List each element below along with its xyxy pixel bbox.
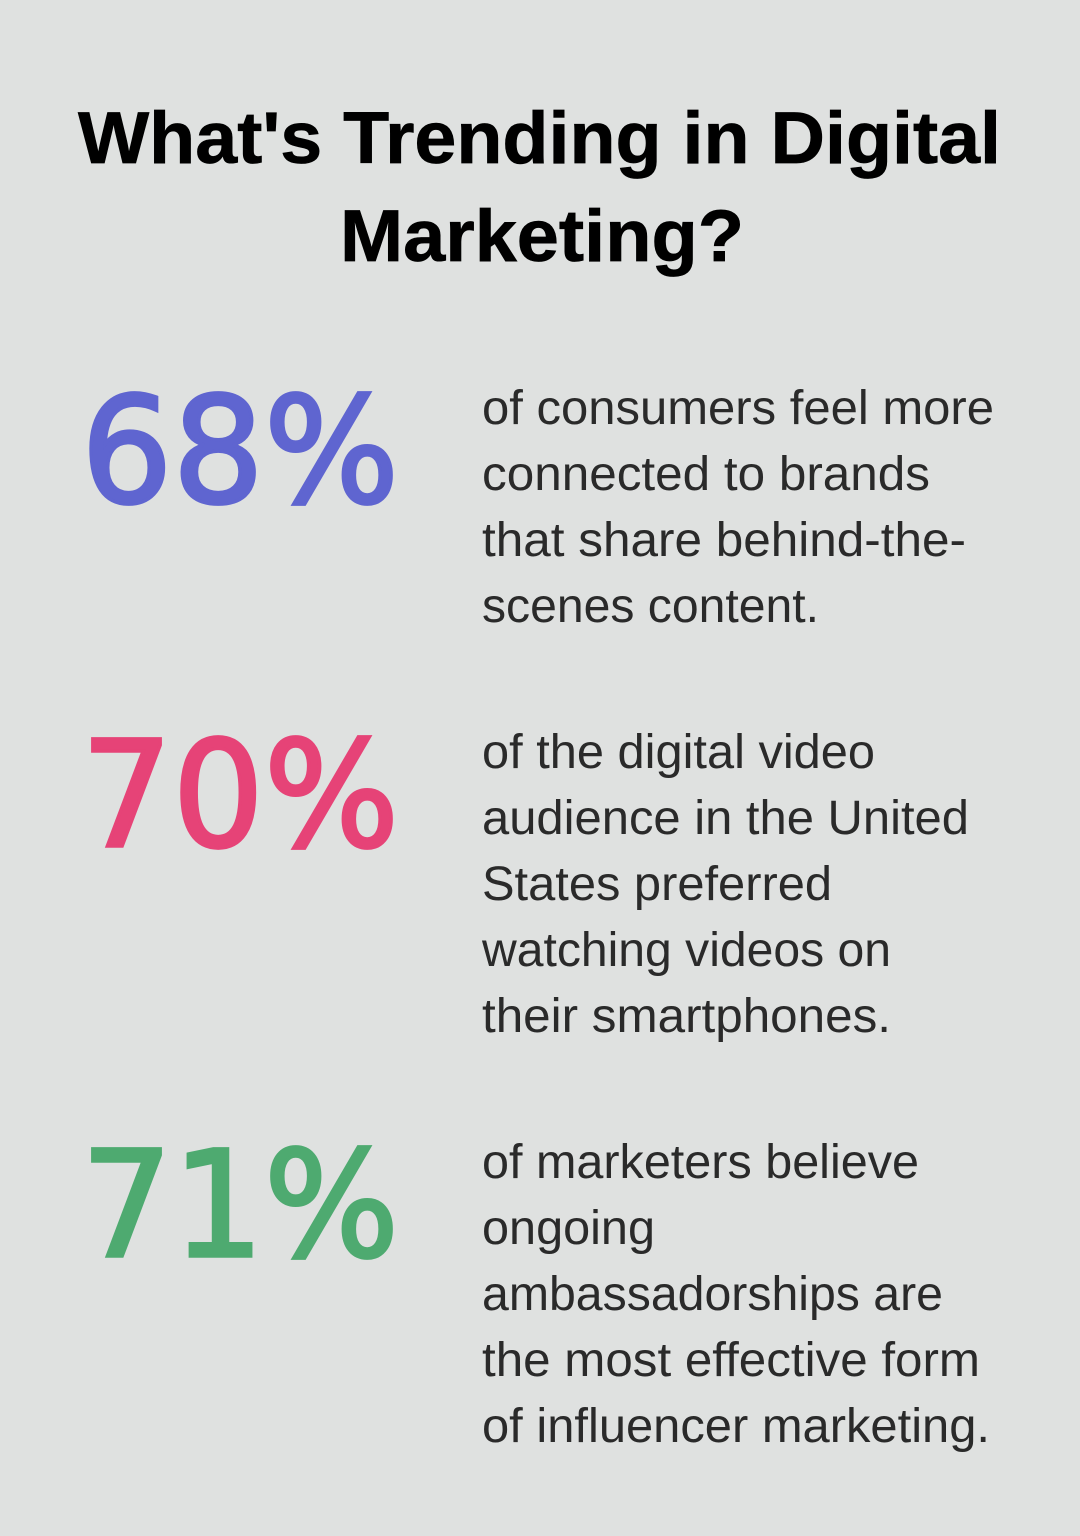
title (78, 98, 1001, 277)
number: 70% (81, 710, 399, 881)
number: 71% (81, 1120, 399, 1291)
text: smartphone video viewing: watching videos on (481, 924, 891, 977)
text: behind-the-scenes content (482, 382, 994, 633)
text: ongoing ambassadorships (482, 1136, 990, 1453)
panel: stat 68% (81, 366, 994, 633)
number: 68%: 68 (81, 366, 264, 537)
text: smartphone video viewing: audience in the United (482, 792, 969, 845)
number: 70%: 70 (81, 710, 264, 881)
text: behind-the-scenes content: connected to brands (482, 448, 930, 501)
text: behind-the-scenes content: scenes content. (482, 580, 819, 633)
number: 68% (81, 366, 399, 537)
title: What's Trending in Digital (78, 98, 1001, 179)
text: ongoing ambassadorships: of marketers believe (482, 1136, 919, 1189)
text: ongoing ambassadorships: ongoing (482, 1202, 655, 1255)
text: ongoing ambassadorships: of influencer marketing. (482, 1400, 990, 1453)
number: 68%: % (264, 366, 399, 537)
text: smartphone video viewing: of the digital video (482, 726, 875, 779)
text: ongoing ambassadorships: ambassadorships are (482, 1268, 943, 1321)
text: ongoing ambassadorships: the most effective form (482, 1334, 980, 1387)
number: 71%: 71 (81, 1120, 264, 1291)
text: smartphone video viewing: States preferred (482, 858, 832, 911)
text: smartphone video viewing: their smartphones. (482, 990, 891, 1043)
panel: stat 70% (81, 710, 969, 1043)
text: behind-the-scenes content: of consumers feel more (482, 382, 994, 435)
number: 71%: % (264, 1120, 399, 1291)
text: smartphone video viewing (481, 726, 969, 1043)
number: 70%: % (264, 710, 399, 881)
panel: stat 71% (81, 1120, 990, 1453)
title: Marketing? (340, 196, 744, 277)
text: behind-the-scenes content: that share behind-the- (482, 514, 966, 567)
